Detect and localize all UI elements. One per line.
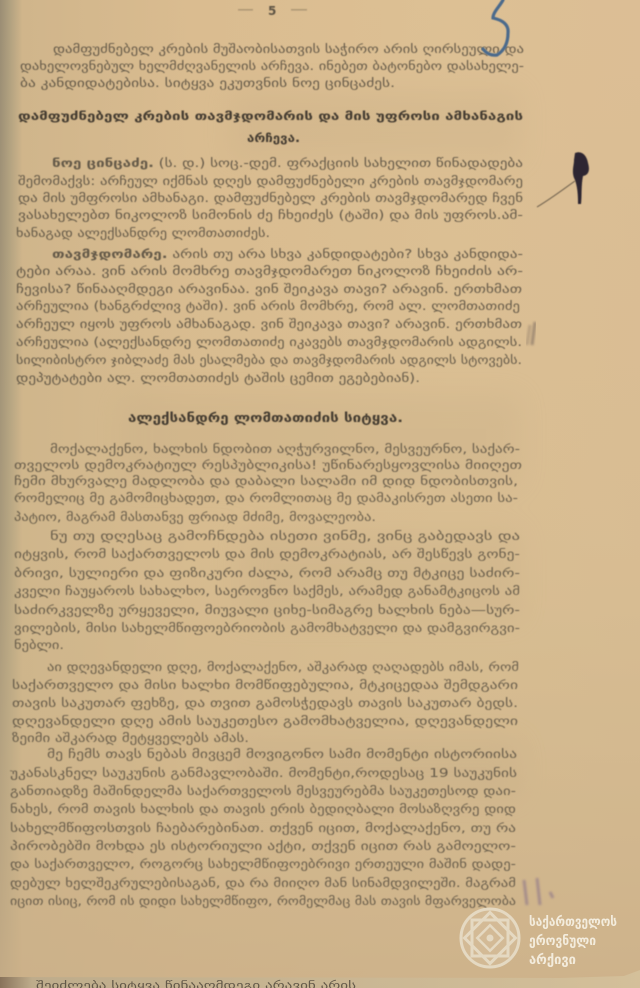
chairman paragraph: ჩევისა? წინააღმდეგი არავინაა. ვინ შეიკავა თავი? არავინ. ერთხმათ (16, 282, 522, 296)
speech body text: მოქალაქენო, ხალხის ნდობით აღჭურვილნო, მესვეურნო, საქარ- (50, 442, 520, 456)
Noe Tsintsadze speech: შემომაქვს: არჩეულ იქმნას დღეს დამფუძნებელი კრების თავმჯდომარე (18, 174, 523, 188)
chairman paragraph: არჩეულია (ალექსანდრე ლომთათიძე იკავებს თავმჯდომარის ადგილს. (16, 335, 522, 349)
chairman paragraph: დეპუტატები ალ. ლომთათიძეს ტაშის ცემით ეგებებიან). (16, 371, 420, 385)
next page strip at bottom (0, 970, 640, 988)
archive logo emblem (461, 909, 519, 967)
speech body text: განთიადზე მაშინდელმა საქართველოს მესვეურებმა საუკეთესოდ დაი- (10, 784, 516, 798)
speech body text: ვილების, მისი სახელმწიფოებრიობის გამომხატველი და დამგვირგვი- (14, 621, 520, 635)
section heading: election of chairman: დამფუძნებელ კრების თავმჯდომარის და მის უფროსი ამხანაგის (18, 109, 523, 123)
speech body text: ნახეს, რომ თავის ხალხის და თავის ერის ბედიღბალი მოსაზღვრე დიდ (10, 802, 516, 816)
chairman paragraph (16, 247, 523, 385)
handwritten blue numeral 3 (483, 0, 508, 55)
speech body text: ნუ თუ დღესაც გამოჩნდება ისეთი ვინმე, ვინც გაბედავს და (50, 529, 520, 543)
faint bleed-through texture (120, 90, 520, 800)
section heading: speech of Alexandre Lomtatidze: ალექსანდრე ლომთათიძის სიტყვა. (128, 410, 403, 425)
speech body text: საძირკველზე ურყეველი, მიუვალი ციხე-სიმაგრე ხალხის ნება—სურ- (14, 603, 520, 617)
opening paragraph: დამფუძნებელ კრების მუშაობისათვის საჭირო არის ღირსეული და (53, 42, 524, 56)
Noe Tsintsadze speech (16, 156, 523, 240)
speech body text: სახელმწიფოსთვის ჩაებარებინათ. თქვენ იცით, მოქალაქენო, თუ რა (10, 821, 516, 835)
page number (238, 4, 307, 18)
speech body text: პირობებში მოხდა ეს ისტორიული აქტი, თქვენ იცით რას გამოელო- (10, 839, 516, 853)
speech body text: იცით ისიც, რომ ის დიდი სახელმწიფო, რომელმაც მას თავის მფარველობა (10, 894, 516, 908)
ink blot with scratch (537, 152, 589, 207)
speech body text: მე ჩემს თავს ნებას მივცემ მოვიგონო სამი მომენტი ისტორიისა (47, 747, 517, 761)
chairman paragraph: არჩეულია (ხანგრძლივ ტაში). ვინ არის მომხრე, რომ ალ. ლომთათიძე (16, 299, 520, 313)
speech body text: უკანასკნელ საუკუნის განმავლობაში. მომენტი,როდესაც 19 საუკუნის (10, 766, 517, 780)
opening paragraph: დახელოვნებულ ხელმძღვანელის არჩევა. ინებეთ ბატონებო დასახელე- (20, 59, 524, 73)
speech body text: ჩემი მხურვალე მადლობა და დაბალი სალამი იმ დიდ ნდობისთვის, (14, 474, 518, 488)
speech body text: პატიო, მაგრამ მასთანვე ფრიად მძიმე, მოვალეობა. (14, 510, 376, 524)
pencil smudge marks (527, 322, 535, 345)
speech body text: აი დღევანდელი დღე, მოქალაქენო, აშკარად ღაღადებს იმას, რომ (47, 660, 519, 674)
chairman paragraph: თავმჯდომარე. არის თუ არა სხვა კანდიდატები? სხვა კანდიდა- (52, 247, 523, 261)
archive name text: საქართველოს (529, 915, 617, 930)
page number: 5 (268, 4, 276, 18)
chairman paragraph: არჩეულ იყოს უფროს ამხანაგად. ვინ შეიკავა თავი? არავინ. ერთხმათ (16, 317, 522, 331)
archive name text (529, 915, 617, 968)
speech body text: ზეიმი აშკარად მეტყველებს ამას. (12, 731, 249, 745)
speech body text: კველი ჩაუყაროს სახალხო, საეროვნო საქმეს, არამედ განამტკიცოს ამ (14, 584, 520, 598)
opening paragraph: ბა კანდიდატებისა. სიტყვა ეკუთვნის ნოე ცინცაძეს. (20, 76, 395, 90)
chairman paragraph: სილიბისტრო ჯიბლაძე მას ესალმება და თავმჯდომარის ადგილს სტოვებს. (16, 353, 522, 367)
opening paragraph (20, 42, 524, 90)
speech body text (10, 442, 523, 908)
Noe Tsintsadze speech: ხანაგად ალექსანდრე ლომთათიძეს. (16, 226, 270, 240)
section heading: election of chairman (18, 109, 523, 145)
Noe Tsintsadze speech: ვასახელებთ ნიკოლოზ სიმონის ძე ჩხეიძეს (ტაში) და მის უფროს.ამ- (18, 208, 523, 222)
chairman paragraph: ტები არაა. ვინ არის მომხრე თავმჯდომარეთ ნიკოლოზ ჩხეიძის არ- (16, 264, 523, 278)
speech body text: დებულ ხელშეკრულებისაგან, და რა მიიღო მან სინამდვილეში. მაგრამ (10, 876, 516, 890)
speech body text: ნებლი. (14, 638, 64, 652)
speech body text: რომელიც მე გამომიცხადეთ, და რომლითაც მე დამაკისრეთ ასეთი სა- (14, 491, 518, 505)
archive name text: ეროვნული (529, 934, 596, 949)
speech body text: და საქართველო, როგორც სახელმწიფოებრივი ერთეული მაშინ დადე- (10, 857, 516, 871)
speech body text: დღევანდელი დღე ამის საუკეთესო გამომხატველია, დღევანდელი (12, 714, 518, 728)
Noe Tsintsadze speech: ნოე ცინცაძე. (ს. დ.) სოც.-დემ. ფრაქციის სახელით წინადადება (52, 156, 523, 170)
Noe Tsintsadze speech: და მის უმფროსი ამხანაგი. დამფუძნებელ კრების თავმჯდომარედ ჩვენ (18, 191, 523, 205)
speech body text: იტყვის, რომ საქართველოს და მის დემოკრატიას, არ შესწევს გონე- (14, 547, 520, 561)
speech body text: თავის საკუთარ ფეხზე, და თვით გამოსჭედავს თავის საკუთარ ბედს. (12, 696, 518, 710)
archive name text: არქივი (529, 953, 576, 968)
speech body text: თველოს დემოკრატიულ რესპუბლიკისა! უწინარესყოვლისა მიიღეთ (14, 458, 523, 472)
speech body text: ბრივი, სულიერი და ფიზიკური ძალა, რომ არამც თუ მტკიცე საძირ- (14, 566, 520, 580)
purple pencil marks (524, 878, 553, 905)
section heading: election of chairman: არჩევა. (247, 131, 300, 145)
speech body text: საქართველო და მისი ხალხი მომწიფებულია, მტკიცედაა შემდგარი (12, 678, 518, 692)
